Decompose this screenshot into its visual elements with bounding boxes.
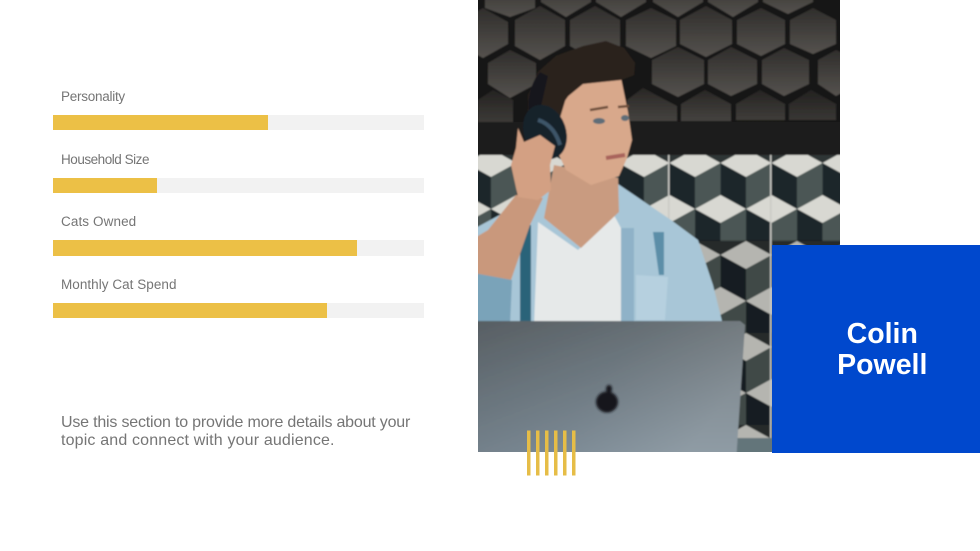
laptop [468,321,745,462]
person: face [552,78,632,185]
person: headphones [516,72,574,165]
bar: Household Size [53,152,424,193]
panel: name card [772,245,980,453]
wall: dark hexagon tiles [458,0,858,125]
bar: Cats Owned [53,214,424,256]
heading: name: Colin [847,318,918,350]
bar: Cats Owned: Cats Owned [61,214,136,229]
heading: name: Powell [837,348,927,380]
person: sleeve cuff [468,272,512,325]
person: neck [544,165,619,248]
person: shirt [534,215,623,325]
icon: laptop logo [596,385,618,412]
person: eyes and mouth [590,106,629,158]
bar: Monthly Cat Spend [53,276,424,318]
person: hair [528,41,635,120]
photo: man with headphones at laptop [478,0,840,452]
bar: Personality [53,89,424,130]
bar: Household Size: Household Size [61,152,149,166]
laptop hinge shadow [728,438,778,462]
wall: black ledge [468,122,850,155]
person: shirt placket and pocket [520,225,668,321]
person: forearm [468,195,543,280]
bar: Monthly Cat Spend: Monthly Cat Spend [61,276,176,292]
wall: cube pattern tiles [468,155,850,462]
decorative yellow stripes [527,430,576,476]
heading: name [837,318,927,380]
text block: description: Use this section to provide more details about your [61,414,410,431]
text block: description: topic and connect with your audience. [61,432,335,448]
person: hand [511,128,555,200]
person: jacket [468,184,723,325]
bar: Personality: Personality [61,89,125,104]
text block: description [61,414,410,448]
bar chart: attributes [53,89,424,318]
